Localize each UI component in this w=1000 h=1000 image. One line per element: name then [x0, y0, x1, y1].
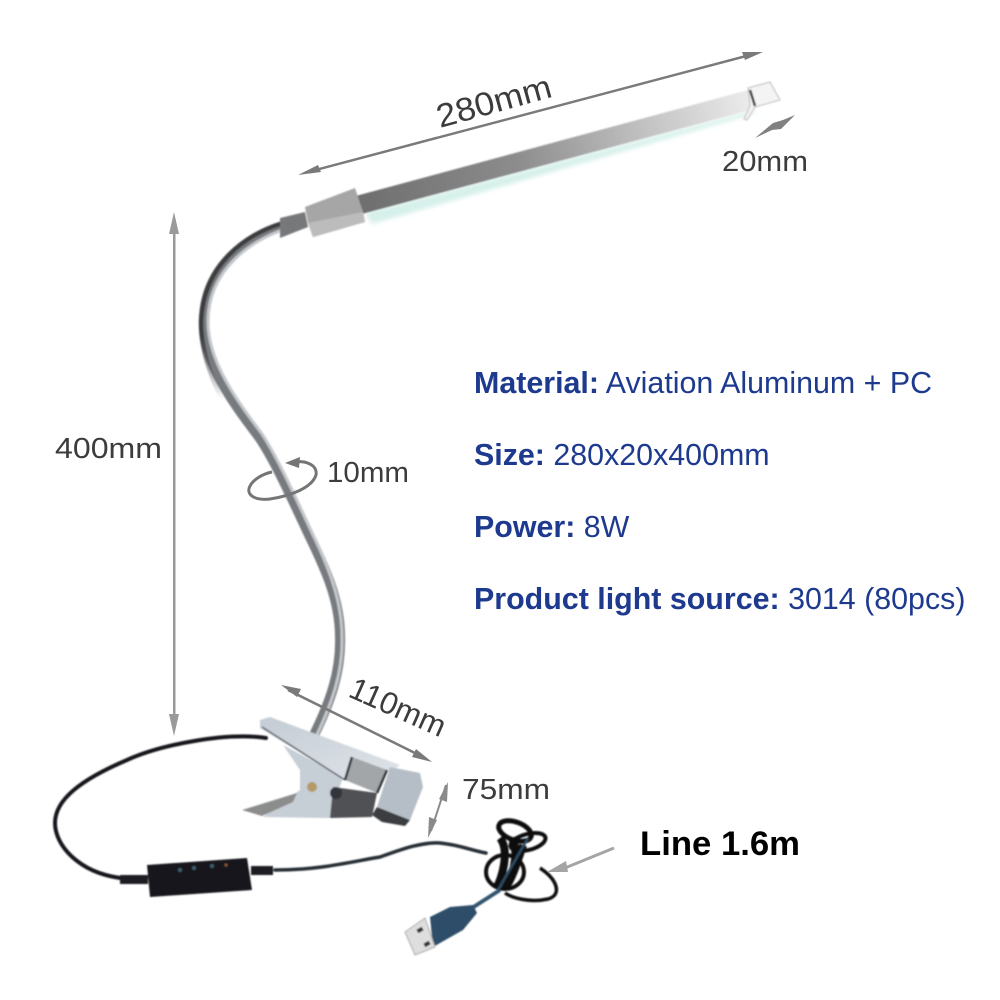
icon: coiled cable [486, 817, 556, 900]
label: line length: Line 1.6m [640, 825, 800, 863]
icon: clip [242, 717, 423, 826]
icon: inline dimmer switch [120, 858, 273, 897]
label: 75mm: 75mm [462, 774, 550, 806]
arrow: 280mm length [298, 52, 763, 175]
label: 10mm: 10mm [327, 457, 409, 489]
icon: lamp head bar [305, 82, 780, 237]
label: 20mm: 20mm [722, 146, 808, 178]
spec: material: Material: Aviation Aluminum + PC [474, 366, 932, 400]
icon: gooseneck arm [201, 224, 342, 743]
arrow: cable pointer [547, 848, 614, 872]
arrow: 110mm clip length [281, 685, 432, 762]
icon: power cable [55, 737, 486, 878]
icon: USB plug [405, 890, 500, 955]
arrow: 20mm width [755, 115, 795, 138]
icon: gooseneck collar [280, 212, 308, 238]
label: 400mm: 400mm [55, 433, 162, 465]
arrow: 75mm clip height [428, 782, 448, 838]
arrow: 400mm height [169, 212, 179, 736]
label: 280mm: 280mm [432, 68, 556, 135]
lamp illustration [55, 82, 780, 955]
label: 110mm: 110mm [344, 670, 452, 744]
icon: 10mm rotation arrow [249, 457, 316, 499]
spec: size: Size: 280x20x400mm [474, 438, 770, 472]
spec: power: Power: 8W [474, 510, 629, 544]
spec: light source: Product light source: 3014 (80pcs) [474, 582, 965, 616]
